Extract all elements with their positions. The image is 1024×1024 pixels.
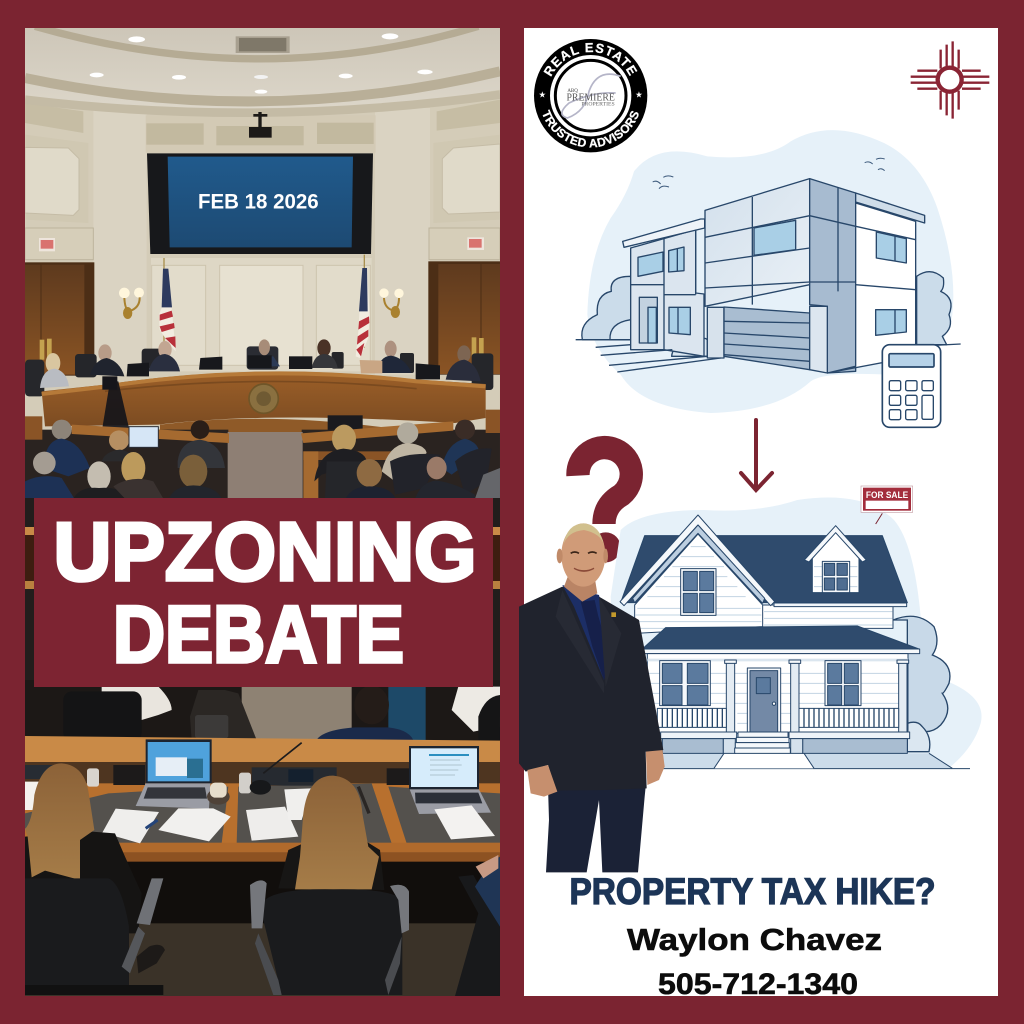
logo badge: PROPERTIES xyxy=(581,103,615,108)
ceiling xyxy=(25,26,500,113)
logo badge: REAL ESTATE xyxy=(544,42,638,77)
curved wooden dais with seal xyxy=(42,372,486,433)
for sale sign xyxy=(861,486,913,524)
lawn xyxy=(657,753,724,768)
monitors on dais xyxy=(127,355,440,379)
illustration group: lower right panel xyxy=(519,448,982,872)
logo badge xyxy=(534,39,648,152)
logo badge: ABQ xyxy=(567,89,578,94)
birds xyxy=(653,158,885,189)
trees and shrubs xyxy=(582,272,951,356)
exit signs xyxy=(39,237,484,251)
panel: council chamber photo (top) xyxy=(25,26,500,499)
left wing xyxy=(631,230,704,356)
panel: council desk photo (bottom) xyxy=(25,680,500,997)
dark side column xyxy=(810,179,856,373)
panel: property illustration column xyxy=(524,28,998,996)
logo badge: TRUSTED ADVISORS xyxy=(542,109,639,148)
council members xyxy=(25,339,493,396)
door xyxy=(747,668,781,732)
neck xyxy=(564,573,597,602)
icon: calculator xyxy=(882,345,941,427)
papers, cups and microphone xyxy=(25,743,495,843)
head xyxy=(561,523,605,587)
suit jacket xyxy=(519,587,663,791)
banner: Upzoning Debate xyxy=(34,498,493,687)
logo badge: ★ xyxy=(538,89,546,99)
seated woman centre xyxy=(278,776,384,890)
icon: Zia sun symbol xyxy=(911,41,989,119)
modern building xyxy=(576,179,961,373)
driveway lines xyxy=(576,340,961,372)
logo badge: PREMIERE xyxy=(566,92,615,103)
photo strips beside banner xyxy=(25,498,500,688)
hands xyxy=(646,748,665,785)
arrow down xyxy=(741,420,772,490)
projector xyxy=(249,112,272,138)
railings xyxy=(657,708,726,727)
roof xyxy=(621,536,907,603)
doors xyxy=(25,261,500,376)
porch windows xyxy=(660,661,710,706)
contact phone: 505-712-1340 xyxy=(658,968,858,1001)
heading line two: DEBATE xyxy=(113,590,404,680)
garage xyxy=(707,307,724,358)
upper wall xyxy=(762,605,893,628)
display screen with date: FEB 18 2026 xyxy=(198,190,319,213)
porch roof xyxy=(642,626,919,649)
white side wall xyxy=(827,203,916,373)
bushes xyxy=(893,616,950,752)
heading line one: UPZONING xyxy=(54,505,476,598)
suburban house xyxy=(620,515,970,769)
columns xyxy=(726,663,735,732)
main front facade xyxy=(705,179,810,306)
face xyxy=(571,552,597,553)
audience and floor xyxy=(25,410,500,499)
deck, foundation, steps xyxy=(661,732,737,739)
back row seating xyxy=(64,686,500,740)
flags xyxy=(159,255,370,358)
seated woman left xyxy=(25,763,142,933)
question mark xyxy=(578,448,631,562)
display screen with date xyxy=(147,153,373,254)
wall sconces xyxy=(119,288,404,319)
shirt and tie xyxy=(562,585,611,680)
house background blob xyxy=(611,497,982,767)
dormer xyxy=(812,530,859,593)
contact name: Waylon Chavez xyxy=(627,922,882,957)
upper window xyxy=(681,569,716,615)
illustration group: top of right panel xyxy=(534,39,990,428)
wall panels and pillars xyxy=(25,95,500,375)
person: agent in suit xyxy=(519,523,665,872)
office chairs xyxy=(25,855,500,996)
background blob xyxy=(587,130,953,413)
headline: property tax hike: PROPERTY TAX HIKE? xyxy=(570,871,936,912)
porch wall xyxy=(647,654,908,734)
gable wall xyxy=(635,534,763,633)
wooden desk and mats xyxy=(25,736,500,997)
laptops xyxy=(136,739,491,814)
logo badge: ★ xyxy=(635,89,643,99)
for sale sign: FOR SALE xyxy=(866,490,908,500)
trousers xyxy=(546,787,646,872)
